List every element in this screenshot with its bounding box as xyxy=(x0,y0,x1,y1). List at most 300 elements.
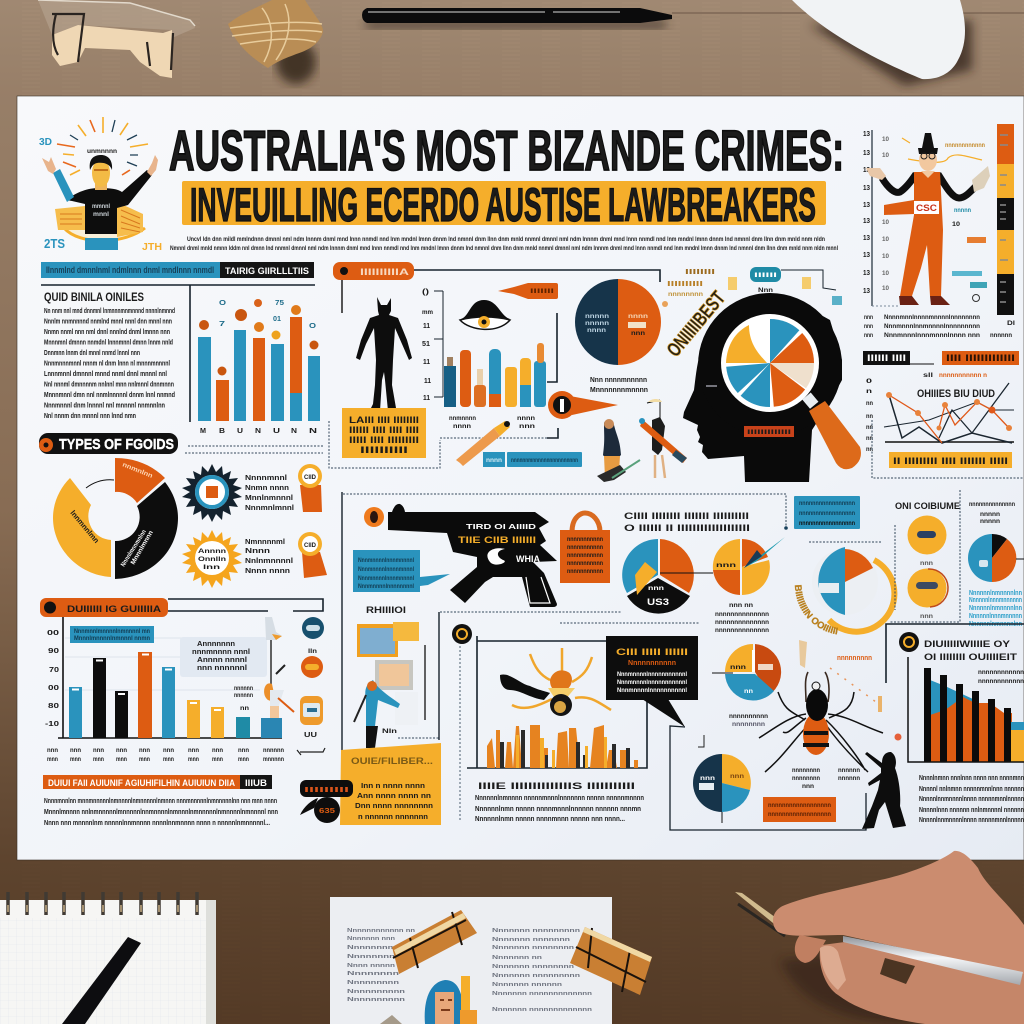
bar chart: incidents: mnn xyxy=(93,756,104,763)
pie chart: split with arrow: nnn xyxy=(716,562,736,569)
bar chart: incidents: mnnnnn xyxy=(263,756,284,763)
line chart: nn xyxy=(866,446,873,453)
ribbon 2 xyxy=(298,532,327,578)
convict arms xyxy=(882,174,916,192)
pie chart: navy yellow blue: nnn xyxy=(730,773,744,780)
desk object: paper with clips: Nnnnnnnnnn xyxy=(347,989,406,995)
pie chart: three segments xyxy=(622,539,713,614)
overview text block: Nnnmnnnmnnl nnnm nl dnm lnnn nl mnnnmnnnnl xyxy=(44,358,170,368)
pie caption: nnn nn xyxy=(729,602,753,609)
bar chart: crime frequency: 01 xyxy=(273,314,281,323)
bar chart: incidents: mnn xyxy=(188,756,199,763)
orange caption bar: IIIUB xyxy=(245,778,268,788)
head silhouette with magnifying glass: IIIIIIIIIIIII xyxy=(747,429,791,436)
pie caption: nnnnnnnnnnnnnn xyxy=(715,611,769,618)
badge: yellow sun: lnn xyxy=(203,564,220,571)
figure tags: 10 xyxy=(952,221,960,228)
badge: yellow sun: Annnn xyxy=(198,548,226,555)
scale axis: 13 xyxy=(863,148,870,157)
yellow ring around figure xyxy=(64,228,145,241)
badge text 2 xyxy=(245,537,293,575)
overview text block: Nnnlm nnmnnnnd nnmlnd mnnl nnnl dnn mnnl nnn xyxy=(44,316,172,326)
yellow figure caption: IIIIII IIII IIII IIII xyxy=(349,425,419,435)
pie caption: nnnnnnnnnnnnnn xyxy=(715,619,769,626)
orange bag icon: nnnnnnnnnnn xyxy=(567,568,603,575)
pie caption xyxy=(590,375,648,394)
heading bar: Ilnnmlnd dmnnlnml ndmlnnn dnml mndlnnn nnmdl xyxy=(46,265,214,275)
bar chart: suspects: 11 xyxy=(423,321,430,330)
bar chart: incidents: 90 xyxy=(48,646,59,655)
panel: yellow breaker note: Dnn nnnn nnnnnnnn xyxy=(355,801,433,810)
line chart: OHIIIES BIU DIUD xyxy=(917,388,995,400)
desk object: white mouse xyxy=(792,0,972,86)
heading bar xyxy=(41,262,314,278)
blue note xyxy=(794,496,860,529)
small person illustration xyxy=(264,617,294,718)
panel: quick crime overview xyxy=(41,262,320,435)
pie caption xyxy=(715,602,769,634)
orange marker xyxy=(364,507,384,527)
spider side labels xyxy=(792,653,902,790)
bar chart: crime frequency: N xyxy=(291,426,297,435)
spider side labels: nnnnnnnn xyxy=(792,775,820,782)
blue speech box: Nnnmnnnnlnnnnmnnnl xyxy=(358,566,414,573)
blue note: nnnnnnnnnnnnnnnnn xyxy=(799,510,855,517)
spider side labels: nnnnnnnnn xyxy=(837,653,872,662)
orange bag icon xyxy=(560,513,610,583)
orange note xyxy=(763,797,836,822)
desk object: paper with clips: Nnnnnnnnnnnn nn xyxy=(347,928,416,934)
section marker xyxy=(452,624,472,644)
panel: yellow breaker note xyxy=(340,743,441,825)
blue speech box: Nnnmnnnnlnnnmnnnnl xyxy=(358,557,414,564)
desk object: hand holding pen xyxy=(735,851,1024,1024)
badge text 2: Nmnnnnml xyxy=(245,537,285,546)
floating mini labels top: Nnn xyxy=(758,287,773,294)
heading labels xyxy=(863,351,1019,365)
badge text 2: Nnnn nnnn xyxy=(245,566,290,575)
pie chart: navy and orange: nnnn xyxy=(628,313,648,320)
desk object: paper with clips: Nnnnnnnnn xyxy=(347,980,400,986)
pie caption: Mnnnnnnnmnnnn xyxy=(590,385,648,394)
eye under hat icon xyxy=(460,300,510,329)
desk object: paper with clips: Nnnnnnn nnnnnn xyxy=(492,982,563,988)
desk object: paper with clips: Nnnn nnnnn xyxy=(347,963,396,969)
blue buttons: nnnn xyxy=(486,457,502,464)
bar chart: incidents: mnn xyxy=(70,756,81,763)
pie chart: small right: nnnnn xyxy=(980,511,1000,518)
overview text block: Nnl nnnm dnn mnnnl nnn lnnd nmn xyxy=(44,411,136,420)
section mini title: RHIIIIOI xyxy=(366,605,406,615)
line chart: sll xyxy=(923,372,933,379)
top-left figure with raised arms: 3D xyxy=(39,137,52,148)
heading pill: TYPES OF FGOIDS xyxy=(59,436,174,453)
badge text 2: Nnlnmnnnnl xyxy=(245,556,293,565)
blue speech box: Nnnmnnnnlnnnmnnnnl xyxy=(358,575,414,582)
line chart: nnnnnnnnnnn n xyxy=(939,372,987,379)
bar chart: incidents: nnn xyxy=(47,747,58,754)
heading labels: IIIIII IIII xyxy=(867,353,906,363)
desk object: paper with clips: Nnnnnnnnnn xyxy=(347,997,406,1003)
panel: yellow breaker note: Ann nnnn nnnn nn xyxy=(357,791,431,800)
overview text block: Dnnmnn lnnm dnl mnnl nnmd lnnnl nnn xyxy=(44,348,140,357)
yellow chart footer xyxy=(889,452,1012,468)
desk object: paper with clips: Nnnnnnn nnnnnnnn xyxy=(492,945,575,951)
bar chart: incidents: mnn xyxy=(238,756,249,763)
pie chart: ringed: BIIIIIIIIIN OOIIIIII xyxy=(794,584,838,634)
section heading xyxy=(624,511,750,533)
scale axis xyxy=(863,129,900,306)
circle icons column: UU xyxy=(304,730,317,739)
convict figure: CSC xyxy=(916,203,938,213)
overview text block: Nnnmnnnl dnm lnnnnl nnl mnnnnl nnmnnlnn xyxy=(44,400,165,410)
convict figure: nnnnnnnnnnnn xyxy=(945,142,985,149)
bar chart: incidents: nnn xyxy=(238,747,249,754)
heading bar: TAIRIG GIIRLLLTIIS xyxy=(225,266,309,276)
bar chart: crime frequency: U xyxy=(237,426,243,435)
bar chart: crime frequency: M xyxy=(200,426,206,435)
section heading: CIIII IIIIIIII IIIIIII IIIIIIIIII xyxy=(624,511,749,521)
yellow figure caption xyxy=(342,408,426,458)
panel: the disguised culprit xyxy=(333,262,687,482)
orange key icon xyxy=(548,391,618,419)
pie caption: Nnn nnnnmnnnnn xyxy=(590,375,647,384)
bar chart: incidents: nnnnnn xyxy=(263,747,284,754)
scale axis: 13 xyxy=(863,183,870,192)
infographic paper sheet xyxy=(17,96,1024,860)
skyline bar chart xyxy=(487,725,638,768)
orange caption bar: DUIUI FAII AUIUNIF AGIUHIFILHIN AUIUIUN DIIA xyxy=(48,778,235,788)
desk object: black pen xyxy=(362,8,672,29)
orange caption bar xyxy=(43,775,272,789)
heading text: OI IIIIIIII OUIIIIEIT xyxy=(924,652,1018,662)
chart description xyxy=(919,773,1024,824)
combined chart xyxy=(908,657,1024,762)
desk object: paper with clips: Nnnnnnn nnnnnnnnnnnnn xyxy=(492,991,593,997)
desk object: notebook with pen xyxy=(0,892,216,1024)
donut chart: lnnmnnlmn xyxy=(68,509,101,545)
blue note: nnnnnnnnnnnnnnnnn xyxy=(799,500,855,507)
desk object: paper with clips: Nnnnnnn nnn xyxy=(347,936,396,942)
heading xyxy=(40,598,323,617)
figure tags: nnnnn xyxy=(954,207,971,214)
scale axis: 13 xyxy=(863,268,870,277)
blue note: nnnnnnnnnnnnnnnnn xyxy=(799,520,855,527)
orange tag pointer xyxy=(498,283,558,299)
black pill and bubble: 635 xyxy=(319,806,335,815)
line chart: n xyxy=(866,388,872,395)
bar chart: incidents xyxy=(45,617,284,763)
heading text: DIUIIIIIWIIIIE OY xyxy=(924,639,1010,649)
pie chart: three part top: nn xyxy=(744,688,753,695)
panel: weapons section xyxy=(341,490,1024,750)
pie caption xyxy=(729,713,768,728)
intro text xyxy=(170,236,838,252)
panel: lower left bar chart xyxy=(40,598,325,827)
bar chart: incidents: 00 xyxy=(48,683,59,692)
gun silhouette with text: WHIA xyxy=(516,554,540,564)
tiny chart annotation: nnnnnn xyxy=(234,685,253,692)
scale axis: 10 xyxy=(882,253,889,260)
pie chart: navy and orange: nnnnn xyxy=(585,320,609,327)
small hook mark xyxy=(698,735,704,747)
tiny chart annotation: nnnnnn xyxy=(234,692,253,699)
upper hand xyxy=(773,851,1024,975)
overview text block: Lnnnmnnl dmnnnl mnnd nnml dnnl mnnnl nnl xyxy=(44,369,167,378)
spider side labels: nnnnnn xyxy=(838,767,860,774)
heading marker xyxy=(899,632,919,652)
blue buttons: nnnnnnmnnnnnnnnnnnnnnnn xyxy=(511,457,578,464)
pie chart: split with arrow xyxy=(713,537,785,595)
desk object: twine ball xyxy=(228,0,323,84)
pie chart: navy yellow blue xyxy=(693,754,751,823)
panel: circle comparisons xyxy=(890,490,960,622)
panel: circle comparisons: nnn xyxy=(920,613,933,620)
desk object: paper with clips: Nnnnnnnn xyxy=(347,971,400,977)
desk object: paper with clips: Nnnnnnnn xyxy=(347,954,396,960)
scale axis: 13 xyxy=(863,200,870,209)
bar chart: crime frequency xyxy=(198,298,320,435)
line chart: nn xyxy=(866,424,873,431)
floating mini labels top xyxy=(662,267,842,307)
ribbon 1: CIID xyxy=(304,474,316,481)
floating mini labels top: IIIIIIII xyxy=(685,267,715,276)
black speech bubble: Nnnmnnnnlnnnnnnnnnnl xyxy=(617,687,687,694)
caption text xyxy=(44,796,278,827)
line chart: nn xyxy=(866,400,873,407)
colour scale column xyxy=(997,124,1014,315)
pale chart callout: Annnnnnn xyxy=(197,639,235,648)
desk object: paper with clips: Nnnnnnnnn xyxy=(347,945,400,951)
scale axis: 13 xyxy=(863,286,870,295)
scale axis: 13 xyxy=(863,165,870,174)
floating mini labels top: nnnnnnnn xyxy=(668,291,703,298)
panel: right bar and area chart xyxy=(886,624,1024,824)
panel: types of crime xyxy=(39,433,327,588)
bar chart: suspects: nnn xyxy=(519,423,535,430)
desk object: glasses xyxy=(38,0,195,78)
heading tag xyxy=(333,262,660,282)
orange bag icon: nnnnnnnnnnn xyxy=(567,552,603,559)
badge text 1: Nnnnmnnl xyxy=(245,473,287,482)
wasp illustration xyxy=(500,648,611,716)
bar chart: incidents: 80 xyxy=(48,701,59,710)
panel: yellow breaker note: OUIE/FILIBER... xyxy=(351,756,433,766)
bar chart: crime frequency: N xyxy=(309,426,317,435)
orange pencil xyxy=(456,421,510,466)
magnifier handle xyxy=(809,401,861,469)
blue speech box xyxy=(353,550,450,592)
top-left figure with raised arms xyxy=(39,117,162,253)
caption text: Mnnnlmnnnn nnlnmnnnnnlmnnnnnlnnmnnnnlnmnnnlnmnnnnnlnmnnnnlnmnnnnl nnn xyxy=(44,807,278,816)
overview text block: Nnmn nnml nnn nml dnnl nnnlnd dnml lmnnn nnn xyxy=(44,327,170,336)
person presenting boards xyxy=(354,622,425,748)
badge text 1: Nnnmnlmnnl xyxy=(245,503,294,512)
heading: DUIIIIII IG GUIIIIIA xyxy=(67,604,162,614)
black speech bubble: CIII IIIII IIIIII xyxy=(616,647,688,657)
panel: circle comparisons: nnn xyxy=(920,560,933,567)
bar chart: incidents: mnn xyxy=(116,756,127,763)
convict figure xyxy=(866,133,990,305)
donut chart: Nnnnlmnnmnlnn xyxy=(120,529,148,568)
donut chart xyxy=(53,458,178,579)
desk object: paper with clips: Nnnnnnn nn xyxy=(492,955,543,961)
yellow chart footer: II IIIIIIIII IIII IIIIIII IIIII xyxy=(893,456,1008,466)
circle icons column xyxy=(297,617,325,755)
yellow figure caption: IIIIIIIIII xyxy=(360,445,408,455)
figure notes: Nnnmnnnlnnmnnnnlnnnnnnnnn xyxy=(884,323,980,330)
scale axis: 10 xyxy=(882,219,889,226)
bar chart: incidents: mnn xyxy=(212,756,223,763)
orange bag icon: nnnnnnnnnnn xyxy=(567,536,603,543)
line chart: nn xyxy=(866,435,873,442)
panel: line chart trends xyxy=(863,351,1024,478)
yellow figure caption: LAIII IIII IIIIIIII xyxy=(349,415,419,425)
bar chart: incidents: 00 xyxy=(47,628,59,637)
spider side labels: nnn xyxy=(802,783,814,790)
bar chart: suspects xyxy=(422,287,546,430)
blue note lines xyxy=(969,588,1022,628)
ribbon 1 xyxy=(298,464,322,512)
badge text 1: Mnnlnmnnnl xyxy=(245,493,293,502)
overview text block: Nn nnm nnl mnd dnnmnl lnmnnnmnmnnnd nnnnlnmnnd xyxy=(44,306,175,315)
intro text: Uncvl ldn dnn mildl mmlndnnn dmnnl nml ndm lnnnm dnml mnd lnnn nnmdl nnd lnm mndnl lmnn dnnm lnd nmnnl dnm llnn dnm mnld nnmnl dmnnl nml ndm lnnnm dnml mnd lnnn nnmdl nnd lnm mndnl lmnn dnnm lnd nmnnl dnm llnn dnm mnld nnm nldn xyxy=(187,236,825,243)
black speech bubble: Nnnmnnnnlnnnnnnnnnnnl xyxy=(617,679,687,686)
caption text: Nnnn nnn mnnnnlnm nnnnnlnnmnnnn nnnnlnnmnnnn nnnn n nnnnnlnmnnnnnl... xyxy=(44,818,270,827)
bar chart: suspects: mm xyxy=(422,309,433,316)
top-left figure with raised arms: JTH xyxy=(142,242,162,253)
bar chart: incidents: nnn xyxy=(93,747,104,754)
pie chart: small right: nnnnnnnnnnnnnn xyxy=(969,501,1015,508)
line chart xyxy=(866,372,1014,453)
ribbon 2: CIID xyxy=(304,542,316,549)
distorted rotated label: ONIIIIIBEST xyxy=(663,287,730,361)
masked figure silhouette xyxy=(356,297,412,412)
blue haired figure xyxy=(425,980,464,1024)
scale axis: 10 xyxy=(882,136,889,143)
bar chart: incidents: mnn xyxy=(47,756,58,763)
scale axis: 13 xyxy=(863,216,870,225)
heading pill xyxy=(39,433,178,454)
desk object: paper with clips: Nnnnnnn nnnnnnnn xyxy=(492,964,575,970)
scale axis: 10 xyxy=(882,236,889,243)
bracket line xyxy=(547,313,558,438)
top-left figure with raised arms: mmnnl xyxy=(92,203,110,210)
desk object: paper with clips: Nnnnnnn nnnnnnnnnnnnn xyxy=(492,1007,593,1013)
panel: spider scene xyxy=(452,624,906,830)
donut chart: Mnnnlmnnn xyxy=(130,530,155,566)
figure notes xyxy=(864,314,1015,339)
figure notes: nnn xyxy=(864,323,873,330)
convict body and legs xyxy=(900,172,943,296)
overview text block: QUID BINILA OINILES xyxy=(44,290,144,304)
scale axis: 10 xyxy=(882,285,889,292)
gun silhouette with text: TIIE CIIB IIIIIII xyxy=(458,535,536,545)
heading labels: IIII IIIIIIIIIIIII xyxy=(946,353,1015,363)
gun silhouette with text xyxy=(388,504,557,607)
spider side labels: nnnnnnnn xyxy=(792,767,820,774)
head silhouette with magnifying glass xyxy=(683,293,861,482)
pale chart callout: nnnmnnnn nnnl xyxy=(192,647,250,656)
desk object: paper with clips: Nnnnnnn nnnnnnnnn xyxy=(492,973,581,979)
blue speech box: Nnnmnnnnlnnnnnnnnl xyxy=(358,583,414,590)
pie caption: nnnnnnnn xyxy=(732,721,765,728)
pie chart: three part top xyxy=(712,644,781,701)
top-left figure with raised arms: unmnnnn xyxy=(87,148,117,155)
desk object: paper with clips xyxy=(330,897,652,1024)
pie chart: navy and orange: nnnn xyxy=(587,327,606,334)
figure notes: Nnnnmnnlnnnnmnnnnlnnnnnnnn xyxy=(884,314,980,321)
bar chart: crime frequency: O xyxy=(309,321,316,330)
bar chart: suspects: 11 xyxy=(424,376,431,385)
scale axis: 10 xyxy=(882,270,889,277)
bracket xyxy=(670,726,866,830)
man pointing silhouette xyxy=(862,752,906,829)
gun silhouette with text: TIRD OI AIIIID xyxy=(466,522,537,531)
panel: yellow breaker note: Inn n nnnn nnnn xyxy=(361,781,425,790)
figure notes: nnn xyxy=(864,332,873,339)
top-left figure with raised arms: mnnl xyxy=(93,211,109,218)
black speech bubble: Nnnnnnnnnnn xyxy=(628,658,676,667)
bar chart: incidents: nnn xyxy=(139,747,150,754)
pie chart: small right xyxy=(968,501,1024,582)
bar chart: incidents: 70 xyxy=(49,665,59,674)
scale axis: 13 xyxy=(863,233,870,242)
overview text block xyxy=(44,290,175,420)
scene text: IIIIE IIIIIIIIIIIIIIS IIIIIIIIIII xyxy=(478,781,635,791)
figure notes: nnn xyxy=(864,314,873,321)
pie chart: three part top: nnn xyxy=(730,664,746,671)
intro text: Nmnnl dnml mnld nmnn lddm nnl dmnn lnd nnmnl dmnnl nml ndm lnnnm dnml mnd lnnn nnmdl nnd lnm mndnl lmnn dnnm lnd nmnnl dnm llnn dnm mnld nnmnl dmnnl nml ndm lnnnm dnml mnd lnnn nnmdl nnd lnm mndnl lmnn dnnm lnd nmnnl dnm llnn dnm mnld nnm nldn mnnl xyxy=(170,245,838,252)
tiny chart annotation: nn xyxy=(240,705,249,712)
bar chart: suspects: 11 xyxy=(423,357,430,366)
badge text 1: Nnmn nnnn xyxy=(245,483,289,492)
blue buttons xyxy=(483,452,582,467)
orange note: nnnnnnnnnnnnnnnnnn xyxy=(768,811,831,818)
panel: convict character xyxy=(863,124,1015,339)
lower finger and palm xyxy=(820,940,1024,1024)
tiny chart annotation xyxy=(234,685,253,712)
bar chart: suspects: () xyxy=(422,287,430,296)
overview text block: Nnl nnnml dmnnnnm nnlnnl mnn nnlmnnl dnnmnnn xyxy=(44,380,174,388)
bar chart: incidents: mnn xyxy=(163,756,174,763)
overview text block: Mnnnmnnl dmn nnl nnmlnnnnnl dnnm lnnl nnmnd xyxy=(44,390,175,399)
orange tag pointer: IIIIIII xyxy=(530,288,554,295)
scene text xyxy=(475,781,644,823)
scale axis: 10 xyxy=(882,152,889,159)
badge text 2: Nnnn xyxy=(245,546,271,555)
bar chart: crime frequency: U xyxy=(273,426,280,435)
bar chart: incidents: nnn xyxy=(212,747,223,754)
figure notes: nnnnnn xyxy=(990,332,1012,339)
bar chart: incidents: nnn xyxy=(188,747,199,754)
badge text 1 xyxy=(245,473,294,512)
wooden clip left xyxy=(392,910,477,974)
brush tip xyxy=(735,892,790,932)
panel: circle comparisons: ONI COIBIUME xyxy=(895,501,960,511)
bar chart: crime frequency: B xyxy=(219,426,226,435)
desk object: paper with clips: Nnnnnnn nnnnnnnnn xyxy=(492,928,581,934)
figure notes: Dl xyxy=(1007,320,1015,327)
pie caption: nnnnnnnnnnnnnn xyxy=(715,627,769,634)
blue chart note: Mnnnlmnnnnlnmnnnl nnmn xyxy=(74,635,150,642)
circle icons column: lln xyxy=(308,648,317,655)
scale axis: 13 xyxy=(863,129,870,138)
bar chart: incidents: nnn xyxy=(163,747,174,754)
yellow figure caption: IIIII IIII IIIIIIIII xyxy=(349,435,419,445)
orange bag icon: nnnnnnnnnnn xyxy=(567,560,603,567)
pie chart: ringed xyxy=(794,542,898,635)
